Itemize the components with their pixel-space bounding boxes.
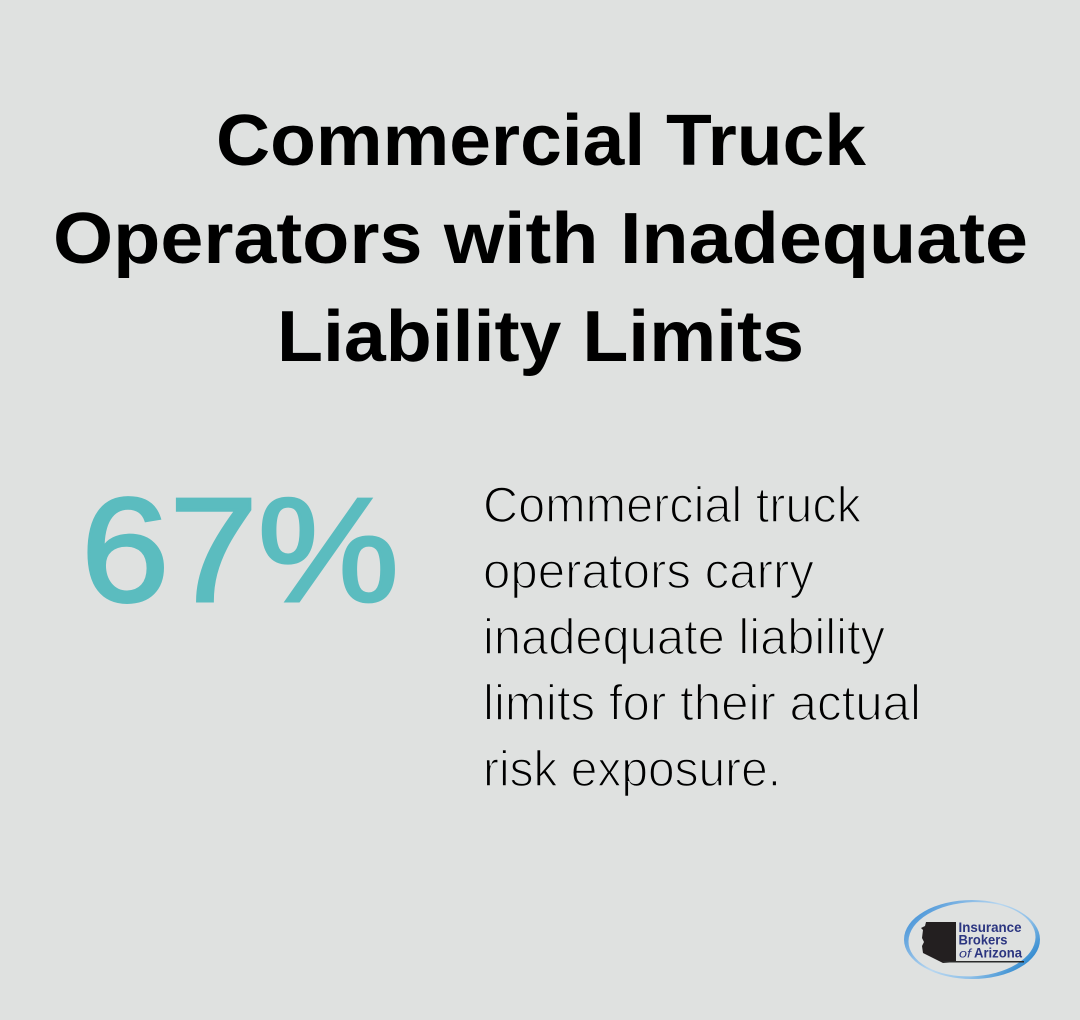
- title: Liability Limits: [277, 297, 804, 377]
- description text: operators carry: [483, 543, 814, 599]
- title: Operators with Inadequate: [53, 199, 1028, 279]
- description text: inadequate liability: [483, 609, 885, 665]
- icon: Arizona state silhouette: [921, 922, 956, 963]
- description text: risk exposure.: [483, 741, 781, 797]
- description text: [483, 477, 921, 797]
- statistic: 67%: 67%: [81, 468, 399, 633]
- logo wordmark: Insurance: [958, 919, 1022, 935]
- description text: limits for their actual: [483, 675, 921, 731]
- logo wordmark: [958, 919, 1022, 960]
- logo wordmark: of: [959, 946, 973, 960]
- logo wordmark: Arizona: [974, 944, 1022, 960]
- description text: Commercial truck: [483, 477, 862, 533]
- logo wordmark: Brokers: [958, 932, 1008, 948]
- logo underline: [943, 961, 1024, 962]
- title: Commercial Truck: [216, 101, 867, 181]
- title: [53, 101, 1028, 377]
- logo oval ring: [904, 900, 1040, 979]
- logo: Insurance Brokers of Arizona: [904, 900, 1040, 979]
